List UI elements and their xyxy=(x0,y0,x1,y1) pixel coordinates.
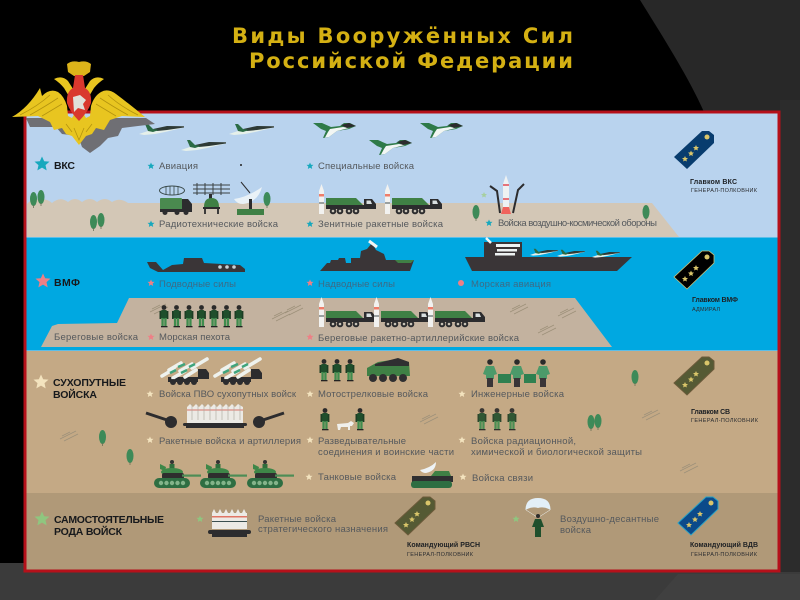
heading: Сухопутные войска xyxy=(34,374,126,401)
item: Воздушно-десантные войска xyxy=(512,498,659,537)
item: Воздушно-десантные войска: войска xyxy=(560,525,592,536)
commander: Главком ВМФ: Главком ВМФ xyxy=(692,297,738,304)
section: ВМФ xyxy=(36,238,738,344)
label: Береговые войска: Береговые войска xyxy=(54,332,139,343)
item: Зенитные ракетные войска: Зенитные ракетные войска xyxy=(318,219,444,230)
emblem shadow xyxy=(26,118,155,153)
infographic panel xyxy=(25,112,779,571)
commander: Главком СВ: ГЕНЕРАЛ-ПОЛКОВНИК xyxy=(691,418,759,424)
title: Российской Федерации xyxy=(249,49,573,73)
eagle heads xyxy=(54,77,104,98)
shield xyxy=(67,75,91,121)
heading: Сухопутные войска: ВОЙСКА xyxy=(53,388,97,401)
trees: ground zone xyxy=(99,370,638,465)
section: Самостоятельные рода войск xyxy=(34,497,758,558)
item: Радиотехнические войска xyxy=(148,182,279,230)
item: Войска ПВО сухопутных войск: Войска ПВО сухопутных войск xyxy=(159,389,297,400)
commander: Главком СВ xyxy=(674,357,759,424)
commander: Командующий РВСН: ГЕНЕРАЛ-ПОЛКОВНИК xyxy=(407,552,474,558)
eagle wings and body xyxy=(12,88,145,145)
item: Войска связи xyxy=(411,462,533,488)
commander: Командующий ВДВ: ГЕНЕРАЛ-ПОЛКОВНИК xyxy=(691,552,758,558)
trees: air zone xyxy=(30,190,104,231)
commander: Командующий ВДВ: Командующий ВДВ xyxy=(690,541,758,549)
item: Морская пехота xyxy=(148,305,243,343)
item: Танковые войска: Танковые войска xyxy=(318,472,397,483)
item: Ракетные войска стратегического назначения xyxy=(196,509,388,537)
heading: Самостоятельные рода войск: РОДА ВОЙСК xyxy=(54,525,123,538)
item: Танковые войска xyxy=(154,460,397,488)
item: Инженерные войска: Инженерные войска xyxy=(471,389,565,400)
item: Морская авиация: Морская авиация xyxy=(471,279,551,290)
item: Подводные силы: Подводные силы xyxy=(159,279,236,290)
crown xyxy=(67,61,91,76)
sea zone xyxy=(26,238,778,350)
item: Инженерные войска xyxy=(458,359,565,400)
heading: ВМФ xyxy=(36,274,80,289)
item: Авиация xyxy=(139,124,274,172)
commander: Главком ВКС xyxy=(674,131,758,194)
item: Морская авиация xyxy=(458,238,632,290)
item: Разведывательные соединения и воинские части: Разведывательные xyxy=(318,436,406,447)
item: Разведывательные соединения и воинские части: соединения и воинские части xyxy=(318,447,454,458)
item: Мотострелковые войска xyxy=(306,358,429,400)
item: Войска воздушно-космической обороны: Войска воздушно-космической обороны xyxy=(498,218,657,229)
item: Войска радиационной, химической и биологической защиты xyxy=(458,408,642,458)
commander: Командующий РВСН: Командующий РВСН xyxy=(407,541,480,549)
commander: Командующий РВСН xyxy=(395,497,480,558)
commander: Главком ВМФ xyxy=(674,251,738,313)
item: Специальные войска xyxy=(306,123,463,172)
item: Радиотехнические войска: Радиотехнические войска xyxy=(159,219,279,230)
heading: ВКС xyxy=(34,156,75,172)
wing feather lines xyxy=(20,95,138,140)
section: ВКС xyxy=(30,123,758,231)
item: Ракетные войска стратегического назначения: стратегического назначения xyxy=(258,524,388,535)
commander: Главком СВ: Главком СВ xyxy=(691,409,730,416)
independent arms zone xyxy=(26,493,778,570)
heading: Самостоятельные рода войск xyxy=(34,512,164,538)
item: Береговые ракетно-артиллерийские войска xyxy=(306,297,520,344)
heading: ВМФ: ВМФ xyxy=(54,277,80,289)
item: Войска радиационной, химической и биологической защиты: химической и биологической защиты xyxy=(471,447,642,458)
title: Виды Вооружённых Сил xyxy=(232,24,573,48)
item: Береговые ракетно-артиллерийские войска: Береговые ракетно-артиллерийские войска xyxy=(318,333,520,344)
commander: Главком ВКС: ГЕНЕРАЛ-ПОЛКОВНИК xyxy=(691,188,758,194)
item: Войска ПВО сухопутных войск xyxy=(146,359,297,400)
item: Воздушно-десантные войска: Воздушно-десантные xyxy=(560,514,659,525)
item: Специальные войска: Специальные войска xyxy=(318,161,415,172)
item: Войска радиационной, химической и биологической защиты: Войска радиационной, xyxy=(471,436,576,447)
commander: Главком ВМФ: АДМИРАЛ xyxy=(692,307,720,313)
heading: Сухопутные войска: СУХОПУТНЫЕ xyxy=(53,377,126,389)
item: Мотострелковые войска: Мотострелковые войска xyxy=(318,389,429,400)
item: Зенитные ракетные войска xyxy=(306,184,444,230)
item: Морская пехота: Морская пехота xyxy=(159,332,231,343)
item: Подводные силы xyxy=(147,258,245,290)
emblem: double-headed eagle xyxy=(12,61,155,153)
item: Войска воздушно-космической обороны xyxy=(472,175,657,229)
air zone land xyxy=(27,199,679,237)
item: Надводные силы: Надводные силы xyxy=(318,279,395,290)
section: Сухопутные войска xyxy=(34,357,759,488)
item: Ракетные войска стратегического назначения: Ракетные войска xyxy=(258,514,337,525)
item: Ракетные войска и артиллерия: Ракетные войска и артиллерия xyxy=(159,436,301,447)
rider xyxy=(73,95,86,112)
panel frame xyxy=(25,112,779,571)
commander: Командующий ВДВ xyxy=(678,497,758,558)
item: Ракетные войска и артиллерия xyxy=(146,404,301,447)
commander: Главком ВКС: Главком ВКС xyxy=(690,179,737,186)
item: Войска связи: Войска связи xyxy=(472,473,533,484)
heading: ВКС: ВКС xyxy=(54,160,75,172)
item: Разведывательные соединения и воинские части xyxy=(306,408,454,458)
coastal land xyxy=(41,298,612,347)
title xyxy=(232,24,573,73)
item: Надводные силы xyxy=(306,241,414,290)
ground zone xyxy=(26,351,778,494)
heading: Самостоятельные рода войск: САМОСТОЯТЕЛЬНЫЕ xyxy=(54,514,164,526)
item: Авиация: Авиация xyxy=(159,161,198,172)
